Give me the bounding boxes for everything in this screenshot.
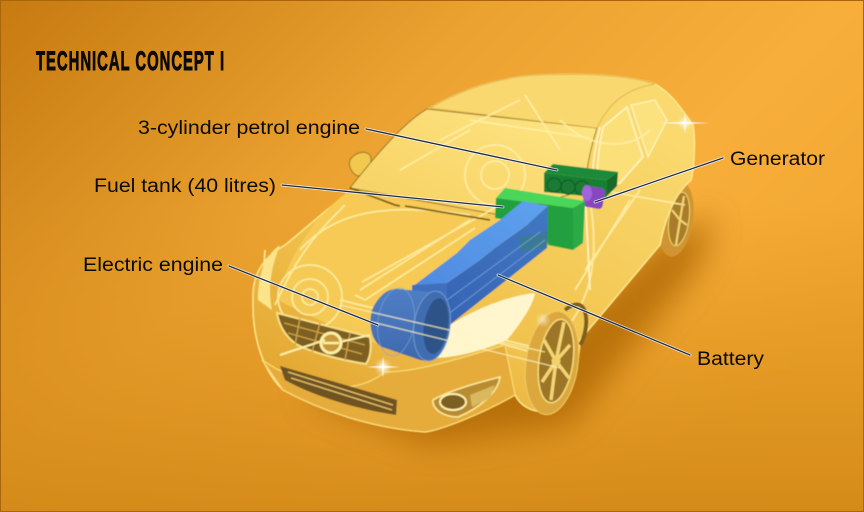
light reflections over parts	[340, 305, 560, 368]
rear wheel	[654, 179, 698, 259]
leader: fuel tank	[282, 185, 503, 207]
leader: electric engine	[229, 266, 378, 325]
battery	[412, 201, 548, 330]
bumper	[262, 345, 515, 432]
wipers	[350, 188, 490, 220]
label: petrol engine: 3-cylinder petrol engine	[138, 118, 360, 139]
leader: battery	[498, 275, 690, 355]
sparkles	[366, 112, 710, 378]
icon: far side mirror	[349, 152, 371, 176]
petrol engine	[544, 164, 618, 198]
headlamp strip	[258, 245, 280, 310]
generator	[582, 185, 606, 210]
label: fuel tank: Fuel tank (40 litres)	[94, 176, 276, 197]
roof	[430, 74, 655, 128]
windscreen	[350, 109, 597, 215]
car body	[253, 74, 694, 432]
front wheel	[519, 308, 585, 418]
title: TECHNICAL CONCEPT I	[36, 45, 224, 76]
leader: petrol engine	[366, 129, 557, 170]
label: battery: Battery	[697, 349, 765, 370]
ghost structure lines	[262, 95, 685, 360]
label: generator: Generator	[730, 149, 826, 170]
side window	[596, 107, 643, 190]
label: electric engine: Electric engine	[83, 255, 223, 276]
leader: generator	[595, 158, 723, 202]
icon: logo	[280, 333, 370, 355]
electric engine	[371, 286, 455, 363]
car shadow	[300, 215, 715, 445]
front arch	[565, 305, 586, 345]
bonnet	[278, 190, 540, 345]
grille	[277, 313, 371, 364]
door edge lines	[585, 127, 600, 290]
rear wheel spokes	[672, 196, 687, 245]
lower grille	[280, 366, 397, 415]
headlight	[433, 293, 535, 358]
fog light	[433, 377, 500, 417]
rear window	[631, 100, 667, 157]
fuel tank	[495, 188, 585, 250]
car illustration	[253, 74, 710, 432]
